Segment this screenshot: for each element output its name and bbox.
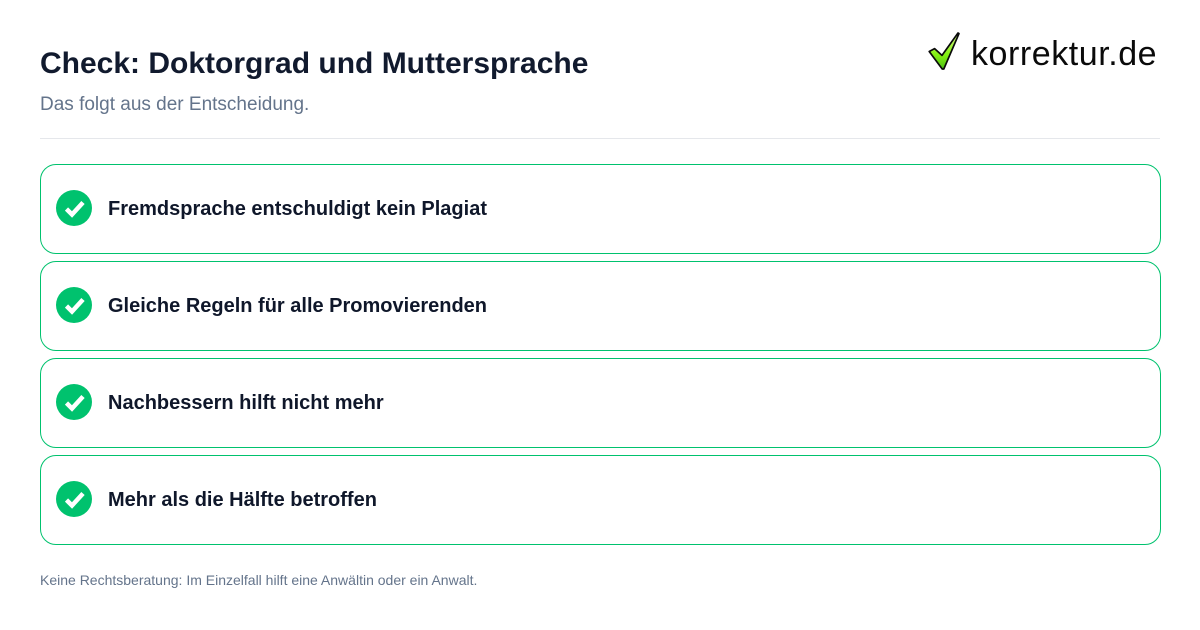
card 1 — [40, 164, 1161, 254]
card 3: Nachbessern hilft nicht mehr — [108, 392, 384, 414]
divider — [40, 138, 1160, 139]
icon: check circle — [56, 384, 92, 420]
card 4: Mehr als die Hälfte betroffen — [108, 489, 377, 511]
title: Check: Doktorgrad und Muttersprache — [40, 47, 588, 80]
card 1: Fremdsprache entschuldigt kein Plagiat — [108, 198, 487, 220]
card 3 — [40, 358, 1161, 448]
subtitle: Das folgt aus der Entscheidung. — [40, 94, 309, 115]
icon: check circle — [56, 481, 92, 517]
card 2: Gleiche Regeln für alle Promovierenden — [108, 295, 487, 317]
footer disclaimer: Keine Rechtsberatung: Im Einzelfall hilft eine Anwältin oder ein Anwalt. — [40, 572, 477, 588]
card 4 — [40, 455, 1161, 545]
icon: check circle — [56, 190, 92, 226]
logo: korrektur.de: korrektur.de — [971, 35, 1157, 73]
card 2 — [40, 261, 1161, 351]
icon: check circle — [56, 287, 92, 323]
